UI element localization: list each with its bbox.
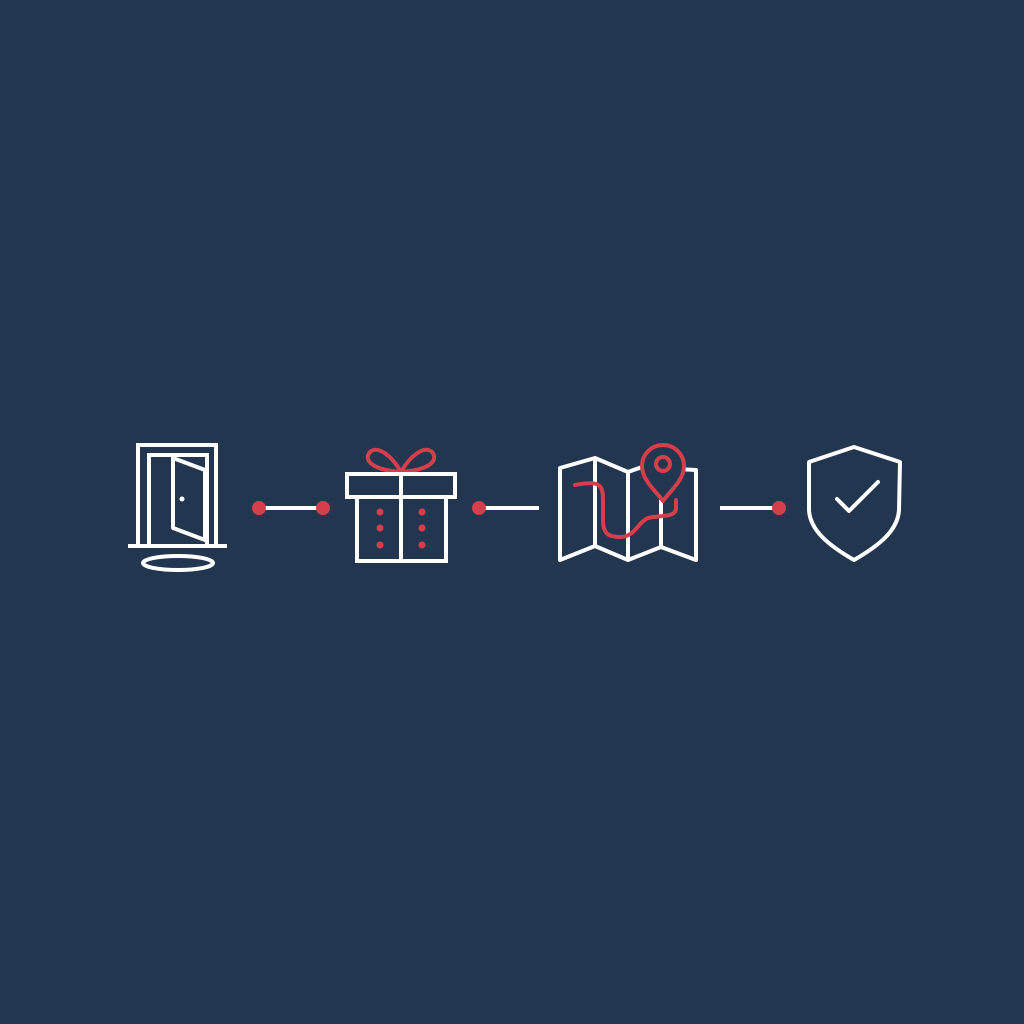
connector 3 <box>720 501 786 515</box>
icon: door <box>128 445 227 570</box>
connector 2 <box>472 501 539 515</box>
icon: map with pin <box>560 445 696 560</box>
connector 1 <box>252 501 330 515</box>
icon: shield with check <box>809 447 900 560</box>
icon: gift <box>347 450 455 561</box>
